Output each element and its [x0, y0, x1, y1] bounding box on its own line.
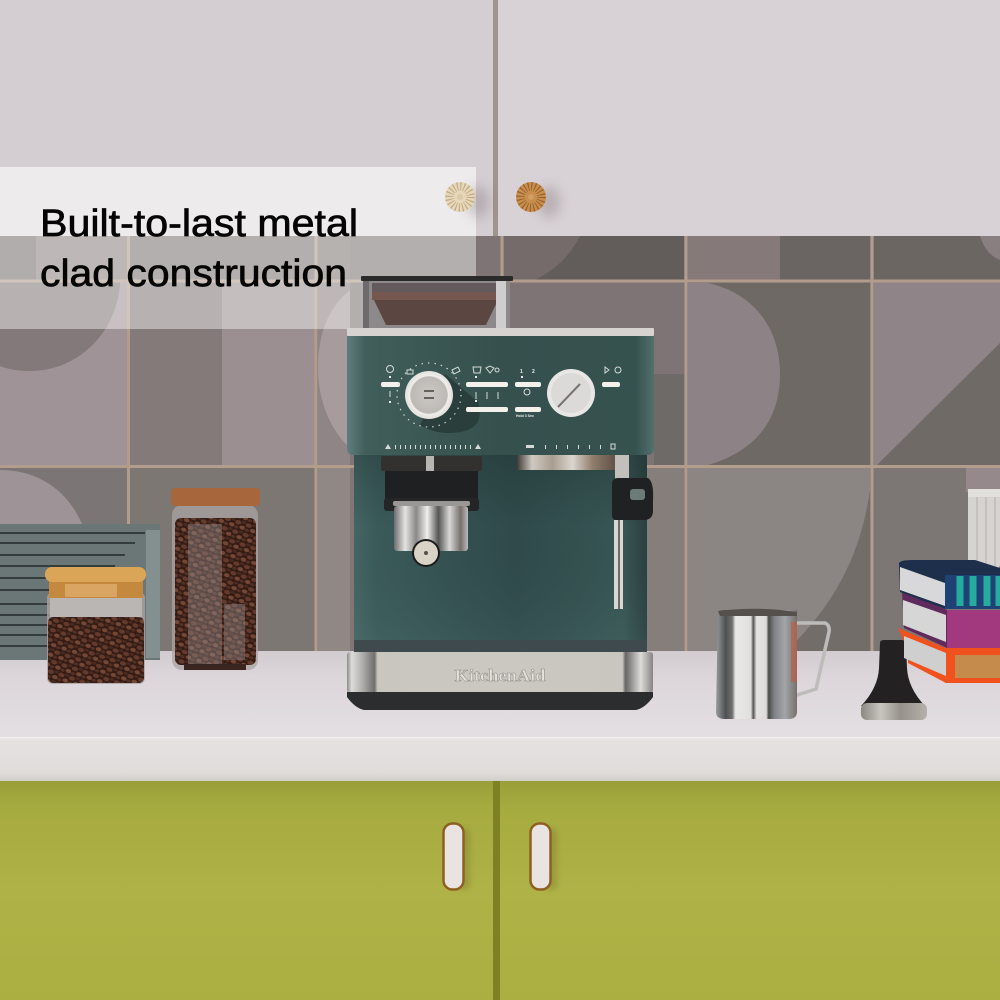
tile backsplash	[0, 236, 1000, 652]
title text: Built-to-last metal	[40, 203, 358, 245]
knob shadows	[467, 186, 560, 218]
bean hopper	[361, 276, 513, 328]
title banner	[0, 167, 476, 329]
steam wand	[612, 455, 653, 609]
orange book	[898, 628, 1000, 683]
grout lines	[0, 236, 1000, 652]
espresso machine	[347, 328, 654, 710]
milk pitcher	[716, 609, 829, 719]
small coffee jar	[45, 567, 146, 684]
black foot	[347, 692, 653, 710]
teal striped book	[899, 560, 1000, 609]
grind dial	[397, 363, 461, 427]
steel base	[347, 652, 653, 693]
portafilter	[393, 501, 470, 567]
tall coffee jar	[171, 488, 260, 670]
upper cabinets	[0, 0, 1000, 236]
cabinet knobs	[445, 182, 560, 218]
indicator dots	[389, 376, 523, 403]
stacked books	[898, 560, 1000, 683]
cup warmer ring	[517, 455, 618, 470]
slate board	[0, 524, 160, 660]
dial shadow	[420, 374, 480, 433]
panel numbers: 1	[520, 369, 523, 375]
panel icons	[386, 366, 621, 399]
panel numbers: Hold 3 Sec	[516, 414, 534, 418]
title text: clad construction	[40, 253, 347, 295]
copper knob	[516, 182, 546, 212]
control buttons	[381, 382, 620, 412]
panel numbers: 2	[532, 369, 535, 375]
lower cabinets	[0, 781, 1000, 1000]
countertop	[0, 651, 1000, 781]
marble container	[968, 489, 1000, 568]
cabinet handles	[444, 824, 557, 890]
tile pattern shapes	[0, 236, 1000, 652]
drip tray lid	[354, 640, 647, 653]
panel numbers	[516, 369, 535, 418]
group head	[381, 456, 482, 511]
top plate	[347, 328, 654, 336]
magenta book	[902, 592, 1000, 648]
cream knob	[445, 182, 475, 212]
control head	[347, 336, 654, 455]
tamper	[861, 640, 927, 720]
machine body	[354, 450, 647, 642]
water level scale	[385, 444, 615, 449]
brand name: KitchenAid	[454, 666, 546, 685]
title text	[40, 203, 358, 295]
pressure gauge	[547, 369, 595, 417]
